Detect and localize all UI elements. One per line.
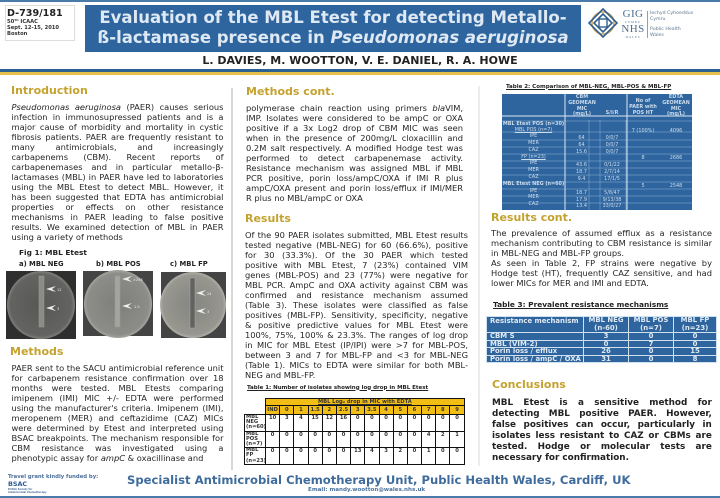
table 1: 9 bbox=[455, 407, 459, 413]
logo: public health wales bbox=[588, 8, 693, 39]
heading: results cont: Results cont. bbox=[491, 210, 572, 224]
table 3: Resistance mechanism bbox=[490, 317, 579, 325]
text: methods cont: performed to detect carbapenemase activity. bbox=[246, 153, 463, 163]
authors: L. DAVIES, M. WOOTTON, V. E. DANIEL, R. A. HOWE bbox=[202, 54, 518, 67]
table 2: 13.4 bbox=[576, 203, 587, 209]
table 2: 4096 bbox=[670, 128, 682, 134]
table 1: 0 bbox=[285, 407, 289, 413]
figure labels: a) MBL NEG bbox=[19, 260, 64, 268]
text: methods: phenotypic assay for ampC & oxacillinase and bbox=[12, 453, 203, 463]
text: results: (Table 1). MICs to EDTA were similar for both MBL- bbox=[245, 360, 468, 370]
text: methods: meropenem (MER) and ceftazidime (CAZ) MICs bbox=[12, 413, 224, 423]
heading: methods: Methods bbox=[10, 344, 63, 358]
text: conclusions: necessary for confirmation. bbox=[492, 452, 629, 462]
table 2: 18.7 bbox=[576, 190, 587, 196]
table 1: 0 bbox=[384, 415, 388, 421]
table 1: 0 bbox=[398, 432, 402, 438]
table 1 title: Table 1: Number of isolates showing log drop in MBL Etest bbox=[247, 384, 428, 390]
title banner: Evaluation of the MBL Etest for detecting Metallo- bbox=[99, 8, 567, 27]
plate b: 1.5 bbox=[134, 305, 140, 309]
text: results cont: in MBL-NEG and MBL-FP groups. bbox=[491, 248, 624, 258]
table 1: 0 bbox=[441, 415, 445, 421]
poster reference box: Boston bbox=[7, 31, 27, 37]
table 2: 9/13/38 bbox=[603, 197, 621, 203]
table 1: 4 bbox=[299, 415, 303, 421]
table 2: 64 bbox=[578, 142, 585, 148]
table 1: 0 bbox=[441, 448, 445, 454]
text: introduction: infection in immunosupressed patients and is a bbox=[12, 112, 224, 122]
plate b bbox=[83, 270, 153, 338]
table 2: 8 bbox=[641, 155, 645, 161]
table 2: 17/1/5 bbox=[604, 176, 620, 182]
table 2 title: Table 2: Comparison of MBL-NEG, MBL-POS & MBL-FP bbox=[506, 84, 671, 90]
bottom rule bbox=[0, 496, 720, 498]
table 2: No of bbox=[636, 98, 650, 104]
table 2: MER bbox=[528, 167, 539, 173]
logo: public health wales: GIG NHS bbox=[621, 8, 645, 35]
heading: introduction: Introduction bbox=[11, 84, 88, 96]
text: methods: for carbapenem resistance confirmation over 18 bbox=[12, 373, 224, 383]
table 2: GEOMEAN bbox=[662, 100, 690, 106]
table 1: MBL Log₂ drop in MIC with EDTA bbox=[318, 399, 412, 405]
travel grant: BSAC bbox=[8, 480, 27, 488]
text: introduction: carbapenems (CBM). Recent reports of bbox=[12, 152, 224, 162]
plate c: 3 bbox=[207, 310, 209, 314]
text: methods cont: polymerase chain reaction using primers blaVIM, bbox=[246, 103, 463, 113]
text: conclusions: detecting MBL positive PAER. However, bbox=[492, 408, 712, 418]
table 1: 4 bbox=[427, 432, 430, 438]
table 1: 4 bbox=[370, 448, 374, 454]
table 2: FP (n=23) bbox=[521, 154, 546, 160]
table 2: 64 bbox=[578, 135, 585, 141]
table 1: 0 bbox=[398, 415, 402, 421]
text: conclusions bbox=[492, 396, 712, 462]
travel grant: Travel grant kindly funded by: bbox=[8, 474, 98, 480]
table 1: 0 bbox=[328, 448, 331, 454]
text: results: MBL PCR. AmpC and OXA activity against CBM was bbox=[245, 280, 468, 290]
footer unit name: Specialist Antimicrobial Chemotherapy Unit, Public Health Wales, Cardiff, UK bbox=[127, 473, 630, 487]
table 2: 0/0/7 bbox=[606, 142, 618, 148]
text: conclusions: tested. Hodge or molecular tests are bbox=[492, 440, 712, 452]
poster reference box: 50ᵗʰ ICAAC bbox=[7, 19, 38, 25]
text: results: positive with MBL Etest, 7 (23%) contained VIM bbox=[245, 260, 468, 270]
top rule bbox=[0, 0, 720, 2]
table 2: GEOMEAN bbox=[568, 100, 596, 106]
table 2: IPE bbox=[530, 160, 537, 166]
poster reference box: Sept. 12-15, 2010 bbox=[7, 25, 59, 31]
header rule bbox=[0, 69, 720, 75]
text: results: & positive predictive values for MBL Etest were bbox=[245, 320, 468, 330]
table 2: 43.6 bbox=[576, 162, 587, 168]
table 3 title: Table 3: Prevalent resistance mechanisms bbox=[493, 300, 668, 308]
table 2: POS HT bbox=[633, 110, 653, 116]
poster reference box bbox=[5, 5, 75, 41]
text: introduction: mechanisms in PAER leading to false positive bbox=[12, 212, 224, 222]
table 2: 2686 bbox=[670, 155, 682, 161]
text: introduction: carbapenemases and in particular metallo-β- bbox=[12, 162, 224, 172]
table 2: IPE bbox=[530, 188, 537, 194]
travel grant: British Society for bbox=[8, 488, 32, 491]
table 1: 0 bbox=[285, 448, 289, 454]
text: results cont: mechanism contributing to CBM resistance is similar bbox=[491, 238, 712, 248]
table 2: 2548 bbox=[670, 183, 682, 189]
text: results: between 3 and 7 for MBL-FP and <3 for MBL-NEG bbox=[245, 350, 468, 360]
text: results: genes (MBL-POS) and 23 (77%) were negative for bbox=[245, 270, 468, 280]
table 1: 3 bbox=[384, 448, 388, 454]
table 1: 2 bbox=[398, 448, 402, 454]
text: methods: months were tested. MBL Etests comparing bbox=[12, 383, 224, 393]
table 1: 5 bbox=[398, 407, 402, 413]
text: results: positives (MBL-FP). Sensitivity, specificity, negative bbox=[245, 310, 468, 320]
text: results: confirmed and resistance mechanism assumed bbox=[245, 290, 468, 300]
table 1: 0 bbox=[299, 448, 303, 454]
table 1: IND bbox=[267, 407, 278, 413]
table 2: 0/0/7 bbox=[606, 149, 618, 155]
table 1: 3 bbox=[285, 415, 289, 421]
figure labels bbox=[19, 260, 208, 268]
plate c: 24 bbox=[207, 292, 212, 296]
table 1: 0 bbox=[370, 415, 374, 421]
text: methods cont: IMP. Isolates were considered to be ampC or OXA bbox=[246, 113, 463, 123]
text: methods: using the manufacturer's criteria. Imipenem (IMI), bbox=[12, 403, 224, 413]
table 1: 8 bbox=[441, 407, 445, 413]
table 1: 0 bbox=[271, 448, 274, 454]
text: methods cont: R plus no MBL/ampC or OXA bbox=[246, 193, 363, 203]
table 1: 16 bbox=[340, 415, 347, 421]
table 2: 18.7 bbox=[576, 169, 587, 175]
table 1: 0 bbox=[413, 432, 416, 438]
table 1: 0 bbox=[271, 432, 274, 438]
text: introduction: has been suggested that EDTA has antimicrobial bbox=[12, 192, 224, 202]
table 1: 10 bbox=[269, 415, 276, 421]
text: results: tested negative (MBL-NEG) for 60 (66.6%), positive bbox=[245, 240, 468, 250]
text: introduction: many antimicrobials, and increasingly bbox=[12, 142, 224, 152]
figure labels: b) MBL POS bbox=[96, 260, 141, 268]
table 1: 0 bbox=[413, 448, 416, 454]
text: methods cont: PCR positive, porin loss/ampC/OXA if IMI R plus bbox=[246, 173, 463, 183]
table 1: 3 bbox=[356, 407, 360, 413]
text: methods: were determined by Etest and interpreted using bbox=[12, 423, 224, 433]
plate a: 12 bbox=[57, 288, 61, 292]
heading: results: Results bbox=[245, 212, 291, 224]
text: results: 100%, 75%, 100% & 23.3%. The ranges of log drop bbox=[245, 330, 468, 340]
text: results cont: The prevalence of assumed efflux as a resistance bbox=[491, 228, 712, 238]
text: introduction: fibrosis patients. PAER are frequently resistant to bbox=[12, 132, 224, 142]
text: results: Of the 90 PAER isolates submitted, MBL Etest results bbox=[245, 230, 468, 240]
table 1: 1.5 bbox=[311, 407, 320, 413]
table 2: (mg/L) bbox=[667, 111, 685, 117]
text: methods cont: Resistance mechanism was assigned MBL if MBL bbox=[246, 163, 463, 173]
text: methods cont: 0.2M salt respectively. A modified Hodge test was bbox=[246, 143, 463, 153]
table 2: MBL Etest NEG (n=60) bbox=[503, 181, 564, 187]
table 2: 9.4 bbox=[578, 176, 585, 182]
text: introduction bbox=[12, 102, 224, 242]
table 3: (n=7) bbox=[640, 324, 662, 332]
logo: public health wales: Wales bbox=[650, 33, 664, 38]
table 1: 12 bbox=[326, 415, 333, 421]
table 2: MER bbox=[528, 194, 539, 200]
text: introduction: using the MBL Etest to detect MBL. However, it bbox=[12, 182, 224, 192]
table 2: MIC bbox=[577, 106, 587, 112]
table 1: 1 bbox=[299, 407, 303, 413]
table 1: 0 bbox=[455, 415, 459, 421]
table 1: 2 bbox=[328, 407, 331, 413]
travel grant bbox=[8, 474, 98, 494]
table 1: 0 bbox=[328, 432, 331, 438]
plate a bbox=[6, 271, 76, 339]
table 1: 0 bbox=[370, 432, 374, 438]
table 3: (n-60) bbox=[594, 324, 618, 332]
figure: etest plates bbox=[6, 270, 226, 339]
text: results bbox=[245, 230, 468, 380]
table 1: 0 bbox=[299, 432, 303, 438]
table 1: 0 bbox=[313, 448, 317, 454]
table 2: EDTA bbox=[669, 94, 683, 100]
text: methods cont: when in the presence of 200mg/L cloxacillin and bbox=[246, 133, 463, 143]
footer email: Email: mandy.wootton@wales.nhs.uk bbox=[308, 487, 425, 493]
logo: public health wales: CYMRU bbox=[625, 20, 641, 24]
table 2: CAZ bbox=[528, 201, 539, 207]
text: results cont: Hodge test (HT), frequently CAZ sensitive, and had bbox=[491, 268, 712, 278]
title banner bbox=[85, 5, 581, 52]
table 2: MIC bbox=[671, 106, 681, 112]
text: conclusions: false positives can occur, particularly in bbox=[492, 418, 712, 430]
table 3 bbox=[486, 316, 717, 363]
text: introduction: major cause of morbidity and mortality in cystic bbox=[12, 122, 224, 132]
table 2: 5 bbox=[641, 183, 645, 189]
table 1: 6 bbox=[413, 407, 416, 413]
table 1: 4 bbox=[384, 407, 388, 413]
table 1: 2.5 bbox=[339, 407, 348, 413]
logo: public health wales: WALES bbox=[626, 35, 640, 39]
figure title: Fig 1: MBL Etest bbox=[19, 248, 87, 256]
table 2: PAER with bbox=[629, 104, 657, 110]
table 2: CBM bbox=[576, 94, 588, 100]
text: methods: PAER sent to the SACU antimicrobial reference unit bbox=[12, 363, 224, 373]
text: results: for 30 (33.3%). Of the 30 PAER which tested bbox=[245, 250, 468, 260]
table 1: 7 bbox=[427, 407, 430, 413]
heading: conclusions: Conclusions bbox=[492, 378, 566, 390]
title banner: ß-lactamase presence in Pseudomonas aeruginosa bbox=[97, 28, 569, 47]
table 2: CAZ bbox=[528, 174, 539, 180]
table 2: MBL POS (n=7) bbox=[515, 127, 552, 133]
table 2: MBL Etest POS (n=30) bbox=[503, 121, 564, 127]
table 1: 13 bbox=[354, 448, 361, 454]
table 1: 0 bbox=[356, 415, 360, 421]
logo: public health wales: Cymru bbox=[650, 17, 666, 22]
table 1: 0 bbox=[313, 432, 317, 438]
text: results: (Table 3). These isolates were classified as false bbox=[245, 300, 468, 310]
text: introduction: results. We examined detection of MBL in PAER bbox=[12, 222, 224, 232]
table 2: 15.6 bbox=[576, 149, 587, 155]
table 1: 0 bbox=[342, 448, 345, 454]
table 1: 0 bbox=[413, 415, 416, 421]
table 1: 0 bbox=[342, 432, 345, 438]
table 2: IPE bbox=[530, 133, 537, 139]
plate a: 3 bbox=[57, 307, 59, 311]
text: conclusions: MBL Etest is a sensitive method for bbox=[492, 396, 712, 408]
text: methods cont: positive if a 3x Log2 drop of CBM MIC was seen bbox=[246, 123, 463, 133]
text: methods: BSAC breakpoints. The mechanism responsible for bbox=[12, 433, 224, 443]
text: results cont: As seen in Table 2, FP strains were negative by bbox=[491, 258, 712, 268]
text: results: in MIC for MBL Etest (IP/IPI) were >7 for MBL-POS, bbox=[245, 340, 468, 350]
table 2: 0/0/7 bbox=[606, 135, 618, 141]
table 2: 7 (100%) bbox=[632, 128, 654, 134]
table 2: 17.9 bbox=[576, 197, 587, 203]
text: results cont bbox=[490, 228, 712, 288]
text: methods cont: ampC/OXA present and porin loss/efflux if IMI/MER bbox=[246, 183, 463, 193]
plate b: >256 bbox=[133, 278, 143, 282]
table 3: (n=23) bbox=[682, 324, 708, 332]
heading: methods cont: Methods cont. bbox=[246, 84, 335, 98]
table 2 bbox=[502, 94, 692, 210]
travel grant: Antimicrobial Chemotherapy bbox=[8, 491, 47, 494]
table 1: 0 bbox=[285, 432, 289, 438]
table 1 bbox=[244, 398, 465, 465]
table 1: 0 bbox=[427, 415, 430, 421]
table 1: 15 bbox=[312, 415, 319, 421]
text: conclusions: isolates less resistant to CAZ or CBMs are bbox=[492, 430, 712, 440]
text: methods bbox=[12, 363, 224, 463]
text: methods: imipenem (IMI) MIC +/- EDTA were performed bbox=[12, 393, 224, 403]
text: introduction: Pseudomonas aeruginosa (PAER) causes serious bbox=[12, 102, 224, 112]
table 1: 0 bbox=[356, 432, 360, 438]
table 1: 2 bbox=[441, 432, 445, 438]
table 1: 1 bbox=[427, 448, 430, 454]
text: introduction: using a variety of methods bbox=[12, 232, 123, 242]
table 2: MER bbox=[528, 140, 539, 146]
figure labels: c) MBL FP bbox=[170, 260, 208, 268]
table 2: S/I/R bbox=[606, 110, 618, 116]
table 2: (mg/L) bbox=[573, 111, 591, 117]
table 1: 0 bbox=[384, 432, 388, 438]
text: results cont: lower MICs for MER and IMI and EDTA. bbox=[491, 278, 649, 288]
plate c bbox=[160, 272, 226, 338]
text: methods: CBM resistance was investigated using a bbox=[12, 443, 224, 453]
logo: public health wales: Iechyd Cyhoeddus bbox=[650, 11, 693, 16]
text: results: NEG and MBL-FP. bbox=[245, 370, 315, 380]
poster reference box: D-739/181 bbox=[7, 8, 63, 19]
text: methods cont bbox=[246, 103, 463, 203]
table 1: 1 bbox=[455, 432, 459, 438]
table 2: 2/7/14 bbox=[604, 169, 620, 175]
text: introduction: lactamases (MBL) in PAER have led to laboratories bbox=[12, 172, 224, 182]
logo: public health wales: Public Health bbox=[650, 27, 681, 32]
table 2: CAZ bbox=[528, 147, 539, 153]
text: introduction: properties or effects on other resistance bbox=[12, 202, 224, 212]
table 2: 5/8/47 bbox=[604, 190, 620, 196]
table 1: 0 bbox=[455, 448, 459, 454]
table 1: 3.5 bbox=[367, 407, 376, 413]
table 2: 33/0/27 bbox=[603, 203, 621, 209]
table 2: 0/1/22 bbox=[604, 162, 620, 168]
